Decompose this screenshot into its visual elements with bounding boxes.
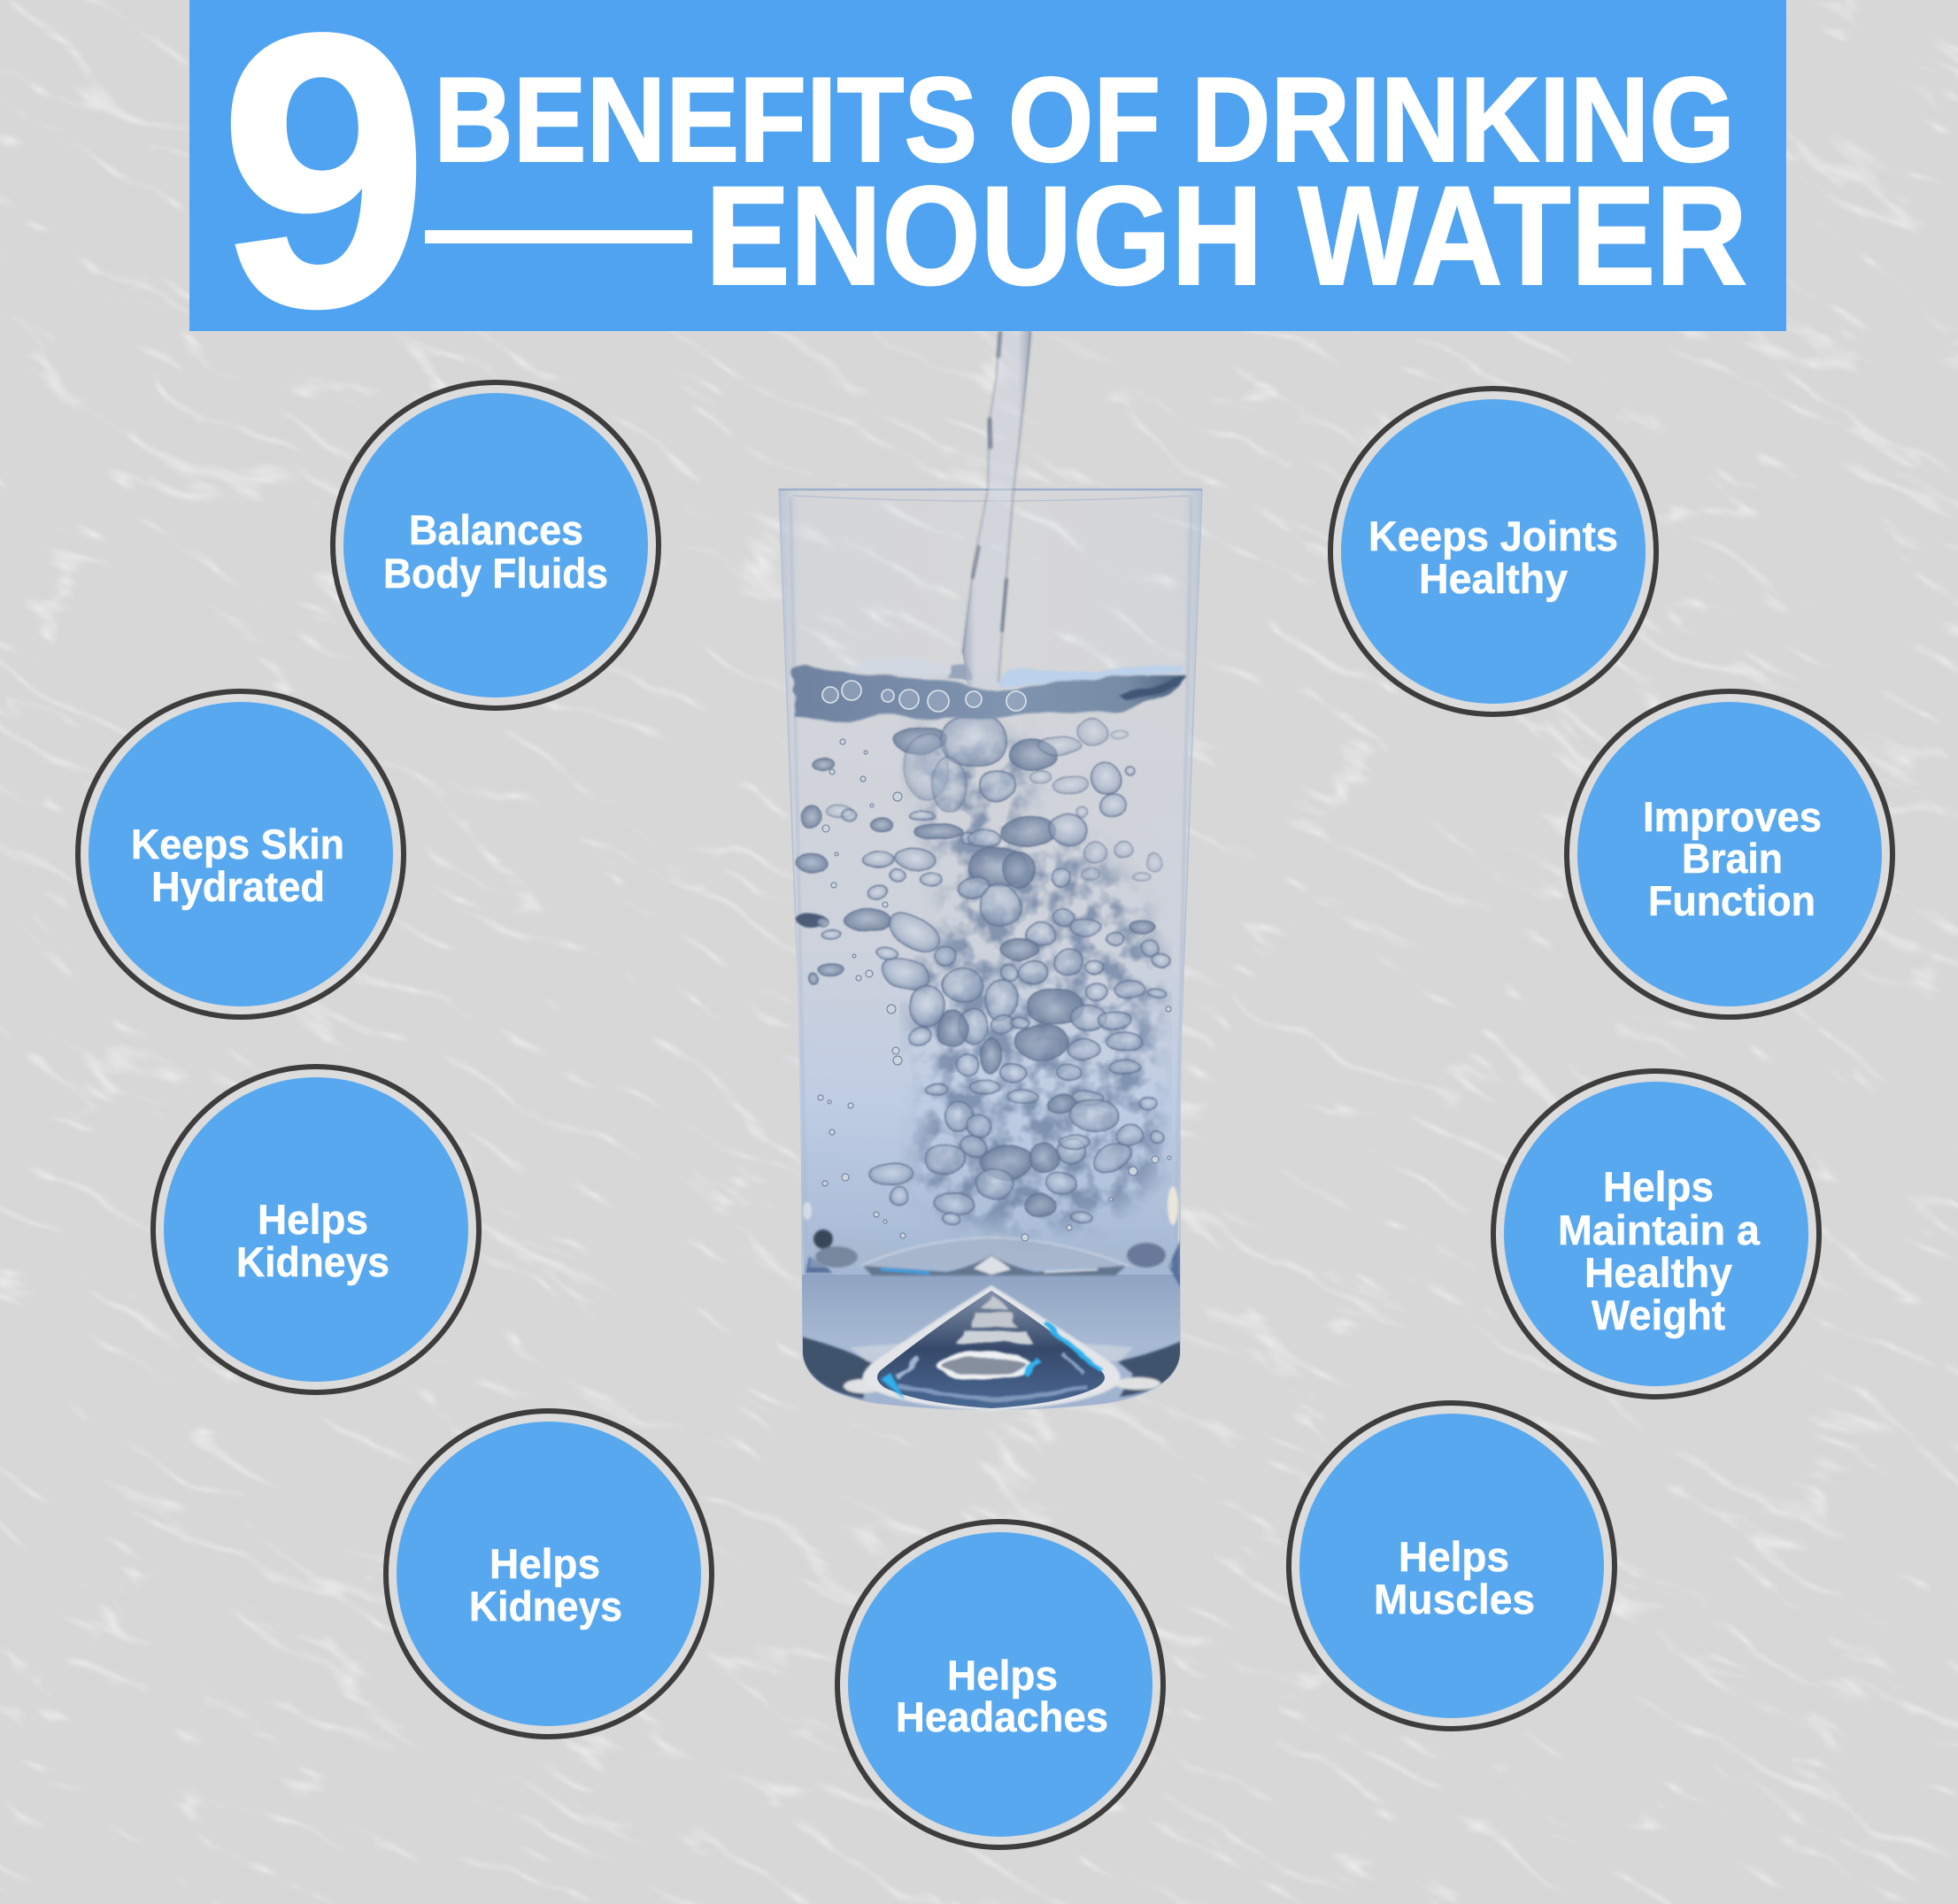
benefit: Keeps Skin Hydrated: Hydrated [151,863,325,910]
glass body [779,489,1202,1409]
benefit: Keeps Skin Hydrated [78,691,404,1017]
glass inner walls [779,489,1202,1239]
benefit: Helps Kidneys (left): Kidneys [236,1238,389,1285]
glass base [802,1275,1180,1409]
dark reflections in base [801,1239,1182,1399]
cone-shaped glass bottom [862,1285,1121,1411]
benefit: Improves Brain Function: Brain [1682,835,1783,882]
benefit: Helps Kidneys (lower) [386,1411,712,1737]
benefit: Helps Maintain a Healthy Weight: Healthy [1584,1249,1732,1296]
air bubbles [797,714,1168,1225]
benefit: Improves Brain Function [1567,691,1892,1017]
benefit: Helps Muscles: Muscles [1374,1576,1535,1623]
pouring water stream [962,331,1031,686]
benefit: Helps Headaches: Headaches [896,1693,1108,1740]
rule before heading line 2 [425,230,692,243]
heading line 1: BENEFITS OF DRINKING [434,52,1735,187]
benefit: Helps Muscles: Helps [1399,1533,1509,1580]
benefit: Helps Maintain a Healthy Weight: Weight [1592,1291,1725,1338]
benefit: Helps Kidneys (lower): Kidneys [469,1583,622,1630]
benefit: Balances Body Fluids [333,382,659,708]
header banner [189,0,1786,387]
illustration: glass of water being poured [779,331,1202,1411]
benefit: Keeps Joints Healthy [1330,389,1656,714]
water column [790,673,1189,1275]
benefit: Helps Maintain a Healthy Weight: Maintain a [1558,1206,1761,1253]
heading line 2: ENOUGH WATER [705,157,1747,314]
benefit: Improves Brain Function: Function [1648,877,1815,924]
benefit: Helps Headaches [837,1522,1163,1847]
benefit: Keeps Skin Hydrated: Keeps Skin [131,821,344,867]
benefit: Helps Maintain a Healthy Weight: Helps [1603,1163,1714,1210]
water surface band [792,657,1186,723]
benefit: Balances Body Fluids: Balances [409,506,583,553]
benefit: Helps Maintain a Healthy Weight [1493,1071,1819,1397]
small air bubbles [818,739,1171,1241]
benefit: Balances Body Fluids: Body Fluids [383,550,608,597]
benefit: Helps Kidneys (left) [153,1067,479,1392]
benefit: Keeps Joints Healthy: Keeps Joints [1368,513,1618,559]
benefit: Keeps Joints Healthy: Healthy [1419,555,1568,602]
bubble cloud behind the bubbles [912,729,1160,1227]
inner floor of glass [803,1186,1178,1276]
benefit: Helps Kidneys (left): Helps [258,1196,368,1243]
benefit: Helps Muscles [1289,1403,1615,1729]
benefit: Improves Brain Function: Improves [1643,793,1822,840]
benefit: Helps Kidneys (lower): Helps [490,1540,600,1587]
benefit: Helps Headaches: Helps [947,1652,1058,1699]
